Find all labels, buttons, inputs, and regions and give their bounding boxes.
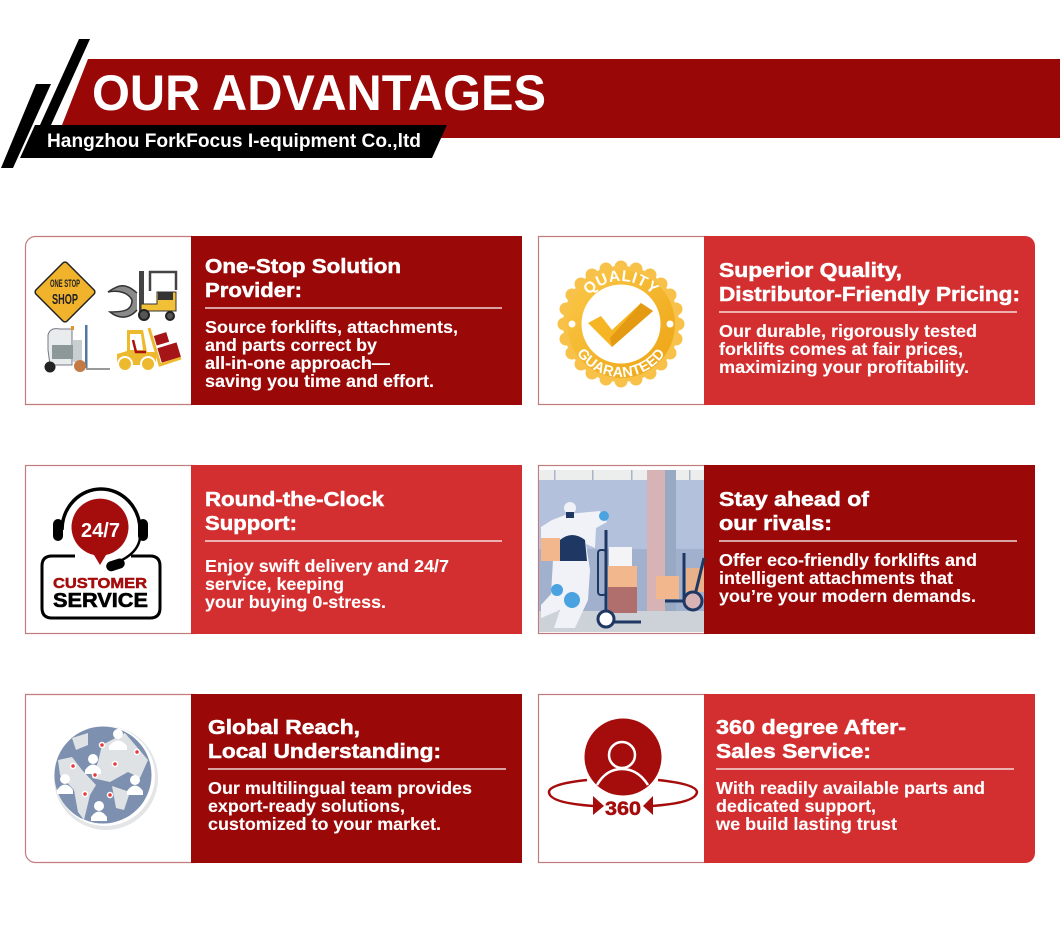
body text: saving you time and effort.: [205, 371, 434, 391]
icon: 24/7 customer service: [42, 489, 160, 618]
panel: after-sales service: [538, 694, 1035, 863]
icon: 360 degree person: [549, 718, 697, 820]
body text: Source forklifts, attachments,: [205, 317, 458, 337]
black slanted stripes: [1, 39, 90, 168]
body text: we build lasting trust: [715, 814, 897, 834]
panel: after-sales service: Sales Service:: [716, 741, 871, 763]
body text: [208, 778, 472, 834]
panel: global reach: Local Understanding:: [208, 741, 441, 763]
icon: 24/7 customer service: SERVICE: [53, 590, 148, 612]
icon: yellow forklift with boxes: [117, 328, 181, 371]
heading: 360 degree After-: [716, 717, 906, 739]
icon: quality guaranteed seal: QUALITY: [584, 270, 660, 293]
body text: [715, 778, 985, 834]
subtitle: Hangzhou ForkFocus I-equipment Co.,ltd: [47, 131, 421, 152]
body text: forklifts comes at fair prices,: [719, 339, 963, 359]
body text: intelligent attachments that: [719, 568, 953, 588]
panel: one-stop solution: Provider:: [205, 280, 302, 302]
heading: One-Stop Solution: [205, 256, 401, 278]
body text: dedicated support,: [716, 796, 876, 816]
icon: 24/7 customer service: CUSTOMER: [53, 575, 147, 592]
panel: stay ahead of rivals: [538, 465, 1035, 634]
icon: quality guaranteed seal: [558, 260, 684, 388]
panel: superior quality: [538, 236, 1035, 406]
icon: one stop shop sign: ONE STOP: [50, 278, 80, 290]
heading: Round-the-Clock: [205, 489, 385, 511]
icon: 360 degree person: 360: [605, 799, 641, 820]
body text: Our durable, rigorously tested: [719, 321, 977, 341]
title: OUR ADVANTAGES: [92, 65, 546, 121]
black subtitle bar: [20, 125, 447, 158]
heading: Stay ahead of: [719, 489, 869, 511]
body text: Our multilingual team provides: [208, 778, 472, 798]
body text: [719, 321, 977, 377]
body text: [205, 556, 449, 612]
body text: customized to your market.: [208, 814, 441, 834]
body text: maximizing your profitability.: [719, 357, 969, 377]
panel: one-stop solution: [26, 236, 522, 405]
illustration: robot in warehouse: [539, 470, 704, 632]
heading: Superior Quality,: [719, 260, 902, 282]
panel: stay ahead of rivals: our rivals:: [719, 513, 832, 535]
body text: With readily available parts and: [716, 778, 985, 798]
body text: you’re your modern demands.: [719, 586, 976, 606]
panel: global reach: [26, 694, 522, 863]
panel: round-the-clock support: [26, 465, 522, 634]
panel: round-the-clock support: Support:: [205, 513, 297, 535]
body text: your buying 0-stress.: [205, 592, 386, 612]
body text: [719, 550, 977, 606]
body text: export-ready solutions,: [208, 796, 405, 816]
body text: [205, 317, 458, 391]
body text: all-in-one approach—: [205, 353, 391, 373]
icon: one stop shop sign: SHOP: [52, 291, 78, 308]
heading: Global Reach,: [208, 717, 360, 739]
body text: and parts correct by: [205, 335, 377, 355]
red title band: [62, 59, 1060, 138]
icon: 24/7 customer service: 24/7: [81, 520, 120, 542]
panel: superior quality: Distributor-Friendly Pricing:: [719, 284, 1020, 306]
body text: service, keeping: [205, 574, 344, 594]
icon: forklift parts: [44, 325, 110, 372]
icon: one stop shop sign: [34, 261, 96, 323]
icon: quality guaranteed seal: GUARANTEED: [578, 349, 663, 378]
header banner: [1, 39, 1060, 168]
icon: clamp forklift: [108, 271, 176, 320]
body text: Offer eco-friendly forklifts and: [719, 550, 977, 570]
body text: Enjoy swift delivery and 24/7: [205, 556, 449, 576]
icon: globe with people: [54, 726, 158, 830]
